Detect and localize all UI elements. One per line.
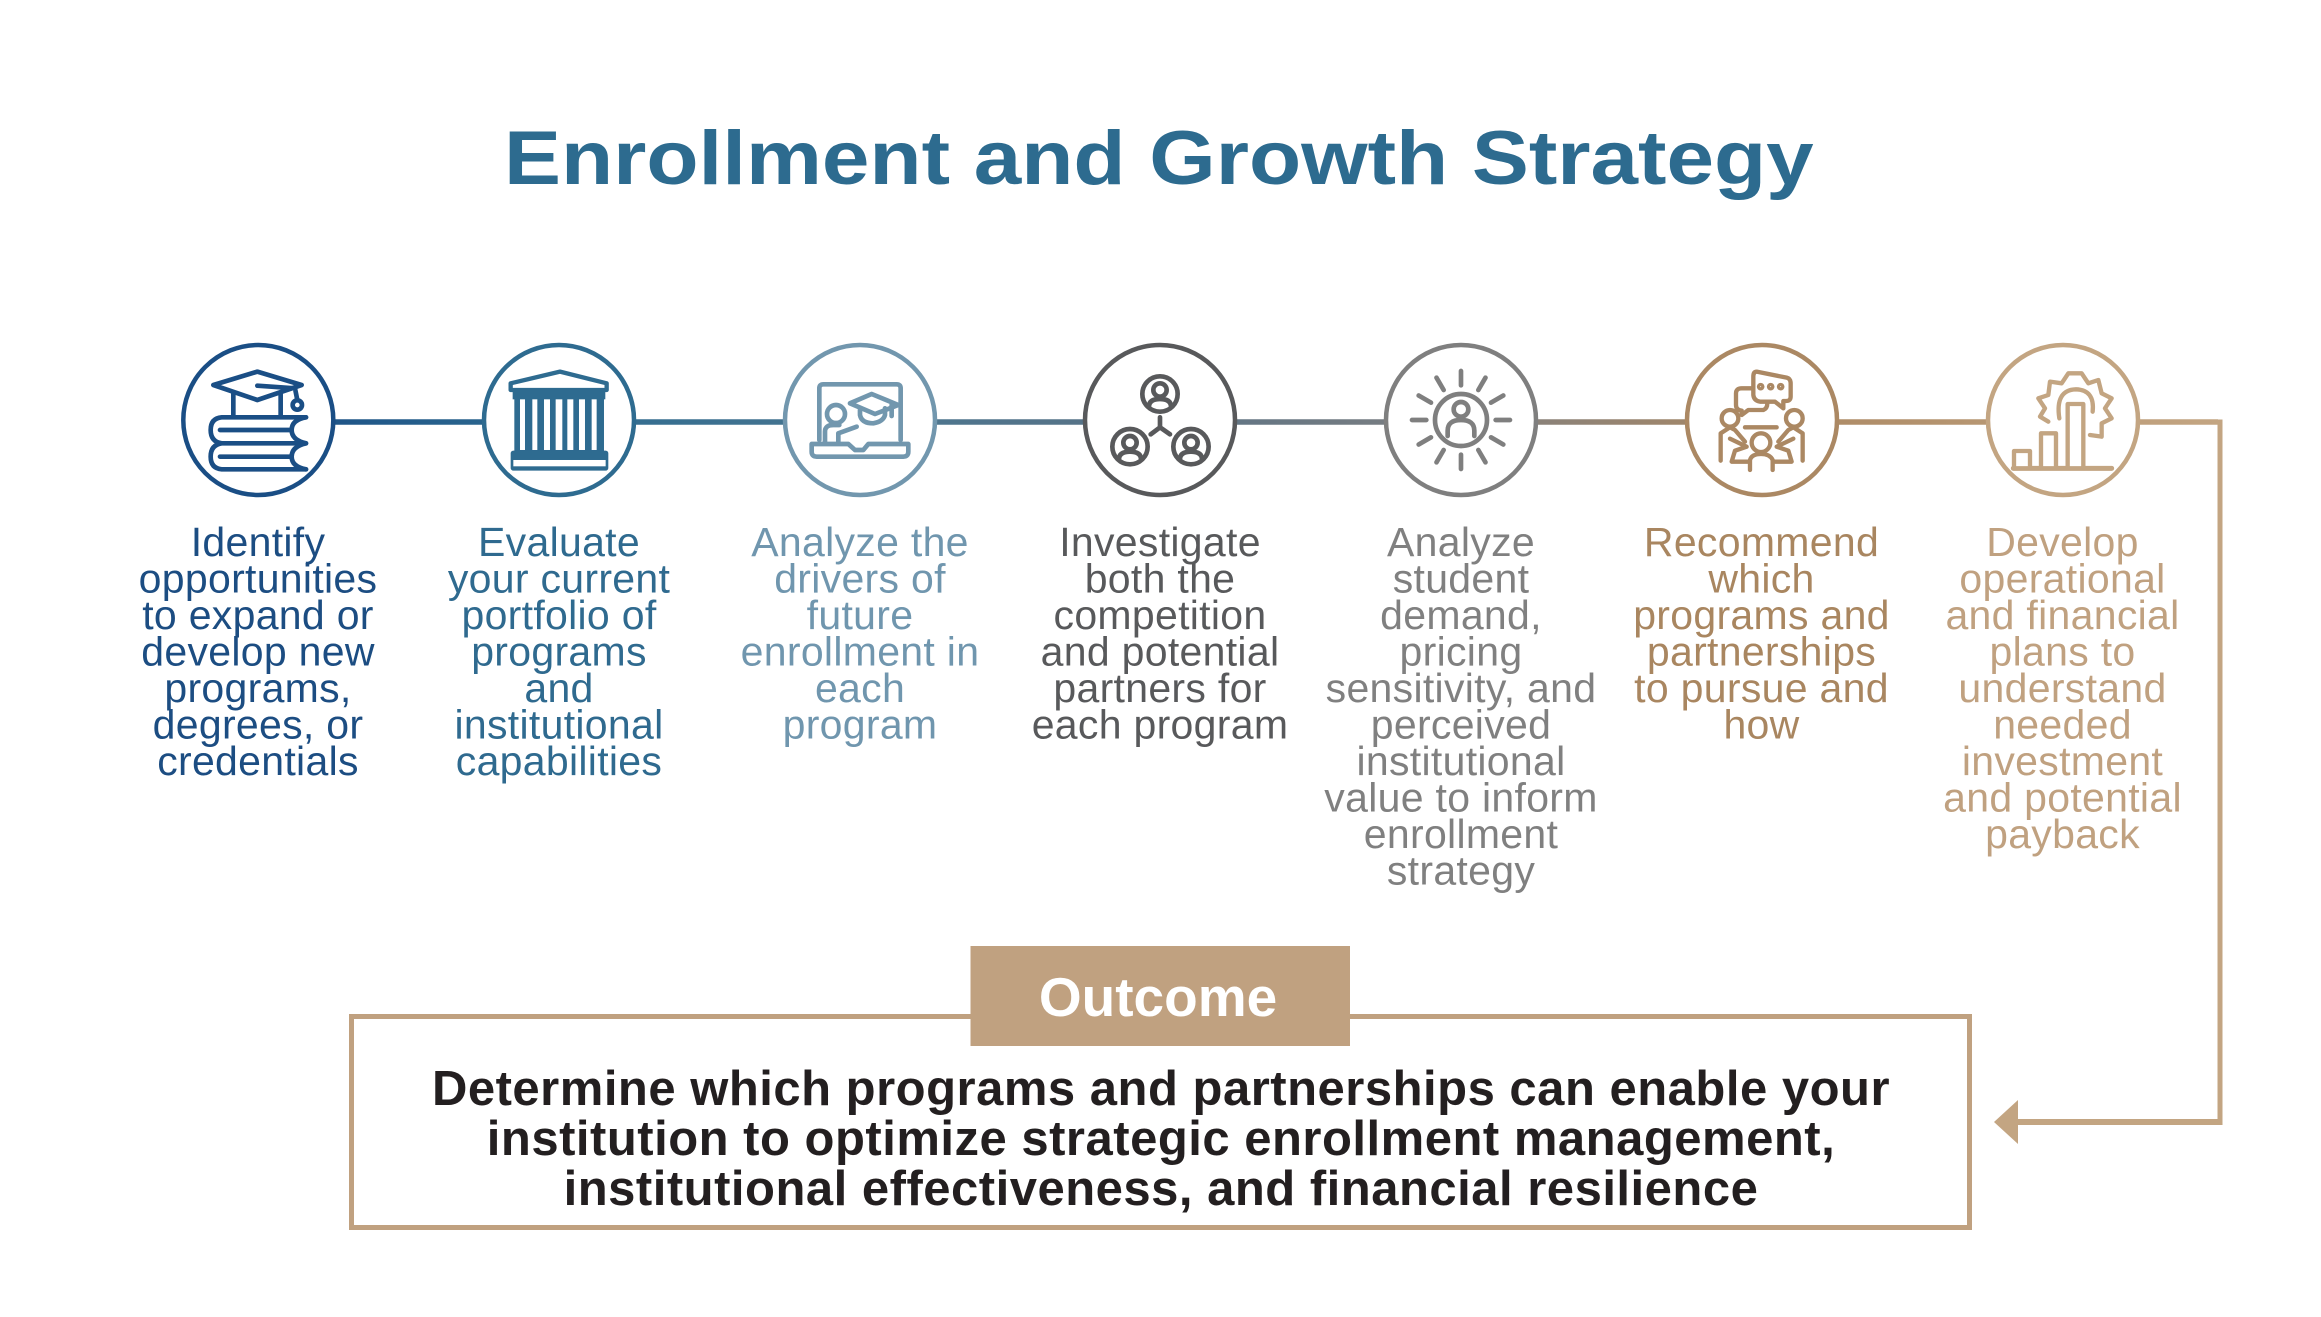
step 1 text: programs, — [164, 665, 352, 711]
outcome statement: institutional effectiveness, and financial resilience — [564, 1162, 1758, 1216]
step 7 text: payback — [1985, 811, 2140, 857]
step 7 text: and financial — [1945, 592, 2180, 638]
step 1 text: degrees, or — [153, 702, 363, 748]
step 6 text: Recommend — [1644, 519, 1879, 565]
outcome statement: Determine which programs and partnerships can enable your — [432, 1062, 1890, 1116]
step 4 text: and potential — [1041, 628, 1279, 674]
step 5 text: perceived — [1371, 702, 1551, 748]
step 1 text: credentials — [157, 738, 359, 784]
step 6 text: programs and — [1633, 592, 1890, 638]
icon: institution building — [484, 345, 634, 495]
step 3 text: each — [815, 665, 905, 711]
step 7 text: needed — [1993, 702, 2132, 748]
step 3 text: drivers of — [774, 556, 946, 602]
step 4 text — [1032, 519, 1288, 748]
icon: meeting with speech bubbles — [1687, 345, 1837, 495]
step 5 text — [1324, 519, 1598, 894]
icon: three connected people — [1085, 345, 1235, 495]
step 5 text: value to inform — [1324, 774, 1598, 820]
step 7 text: investment — [1962, 738, 2163, 784]
step 3 text: enrollment in — [741, 628, 979, 674]
step 2 text: your current — [448, 556, 670, 602]
panel: outcome — [352, 946, 1970, 1228]
step 1 text — [139, 519, 377, 784]
step 7 text: understand — [1958, 665, 2167, 711]
step 2 text: Evaluate — [478, 519, 640, 565]
outcome box border — [352, 1016, 1970, 1228]
step 5 text: sensitivity, and — [1326, 665, 1596, 711]
step 7 text — [1943, 519, 2182, 857]
step 6 text: partnerships — [1647, 628, 1876, 674]
step 4 text: Investigate — [1059, 519, 1261, 565]
step 6 text: to pursue and — [1634, 665, 1889, 711]
step 5 text: Analyze — [1387, 519, 1535, 565]
step 7 text: and potential — [1943, 774, 2182, 820]
outcome heading tag: Outcome — [1039, 966, 1277, 1028]
step 1 text: to expand or — [142, 592, 374, 638]
step 1 text: develop new — [141, 628, 375, 674]
step 3: analyze drivers — [741, 345, 979, 748]
step 7: develop plans — [1943, 345, 2182, 857]
step 5 text: student — [1393, 556, 1530, 602]
step 6: recommend programs — [1633, 345, 1890, 748]
step 3 text: Analyze the — [751, 519, 969, 565]
step 6 text: which — [1707, 556, 1815, 602]
step 4 text: both the — [1085, 556, 1235, 602]
step 6 text: how — [1723, 702, 1800, 748]
icon: online teacher on laptop — [785, 345, 935, 495]
step 7 text: plans to — [1990, 628, 2136, 674]
step 2 text: institutional — [454, 702, 664, 748]
step 4: investigate competition — [1032, 345, 1288, 748]
outcome heading tag — [970, 946, 1350, 1046]
step 7 text: operational — [1959, 556, 2166, 602]
step 1 text: opportunities — [139, 556, 377, 602]
step 7 text: Develop — [1986, 519, 2139, 565]
step 4 text: partners for — [1053, 665, 1267, 711]
step 2 text: and — [524, 665, 594, 711]
icon: gear and bar chart — [1988, 345, 2138, 495]
step 1: identify opportunities — [139, 345, 377, 784]
arrow connector from last step to outcome — [1994, 422, 2222, 1144]
outcome statement — [432, 1062, 1890, 1216]
outcome statement: institution to optimize strategic enrollment management, — [487, 1112, 1835, 1166]
step 5 text: institutional — [1356, 738, 1566, 784]
step 4 text: competition — [1054, 592, 1266, 638]
step 5: analyze student demand — [1324, 345, 1598, 894]
step 5 text: enrollment — [1364, 811, 1559, 857]
step 2 text: portfolio of — [461, 592, 657, 638]
step 4 text: each program — [1032, 702, 1288, 748]
step 5 text: pricing — [1400, 628, 1522, 674]
step 2 text — [448, 519, 670, 784]
step 1 text: Identify — [191, 519, 325, 565]
step 3 text — [741, 519, 979, 748]
step 2 text: capabilities — [456, 738, 662, 784]
step 6 text — [1633, 519, 1890, 748]
step 2 text: programs — [471, 628, 647, 674]
icon: books and graduation cap — [183, 345, 333, 495]
title: Enrollment and Growth Strategy — [504, 116, 1814, 201]
icon: person with radiating rays — [1386, 345, 1536, 495]
step 3 text: program — [783, 702, 937, 748]
step 5 text: strategy — [1387, 848, 1535, 894]
step 3 text: future — [807, 592, 913, 638]
timeline connector line — [258, 419, 2218, 425]
step 5 text: demand, — [1380, 592, 1542, 638]
step 2: evaluate portfolio — [448, 345, 670, 784]
